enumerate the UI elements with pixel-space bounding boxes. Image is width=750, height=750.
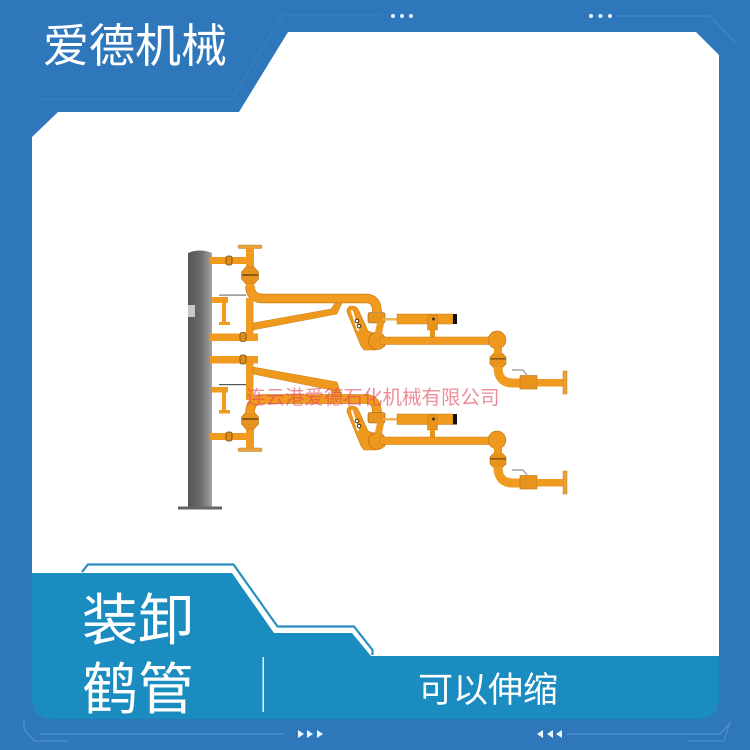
- icon: top dots right: [589, 14, 612, 18]
- upper arm fixed pipework: [210, 245, 377, 342]
- teal outline above band: [82, 564, 372, 655]
- upper arm swivel and outer pipe: [347, 306, 567, 394]
- title: company name: 爱德机械: [43, 20, 227, 72]
- heading: product name: 装卸: [82, 589, 194, 652]
- panel: teal bottom band: [32, 573, 719, 719]
- icon: bottom left-pointing arrows: [537, 730, 562, 738]
- icon: bottom right-pointing arrows: [298, 730, 323, 738]
- panel: white content area: [32, 32, 719, 660]
- lower arm fixed pipework: [210, 355, 377, 452]
- heading: product name: [82, 589, 194, 721]
- lower arm swivel and outer pipe: [347, 406, 567, 494]
- heading: product name: 鹤管: [82, 658, 194, 721]
- text: feature: 可以伸缩: [418, 671, 558, 710]
- grey support column: [178, 250, 222, 510]
- loading arm illustration: [178, 245, 567, 510]
- icon: top dots left: [391, 14, 413, 18]
- watermark: company full name: 连云港爱德石化机械有限公司: [246, 387, 500, 409]
- divider line in band: [262, 657, 264, 712]
